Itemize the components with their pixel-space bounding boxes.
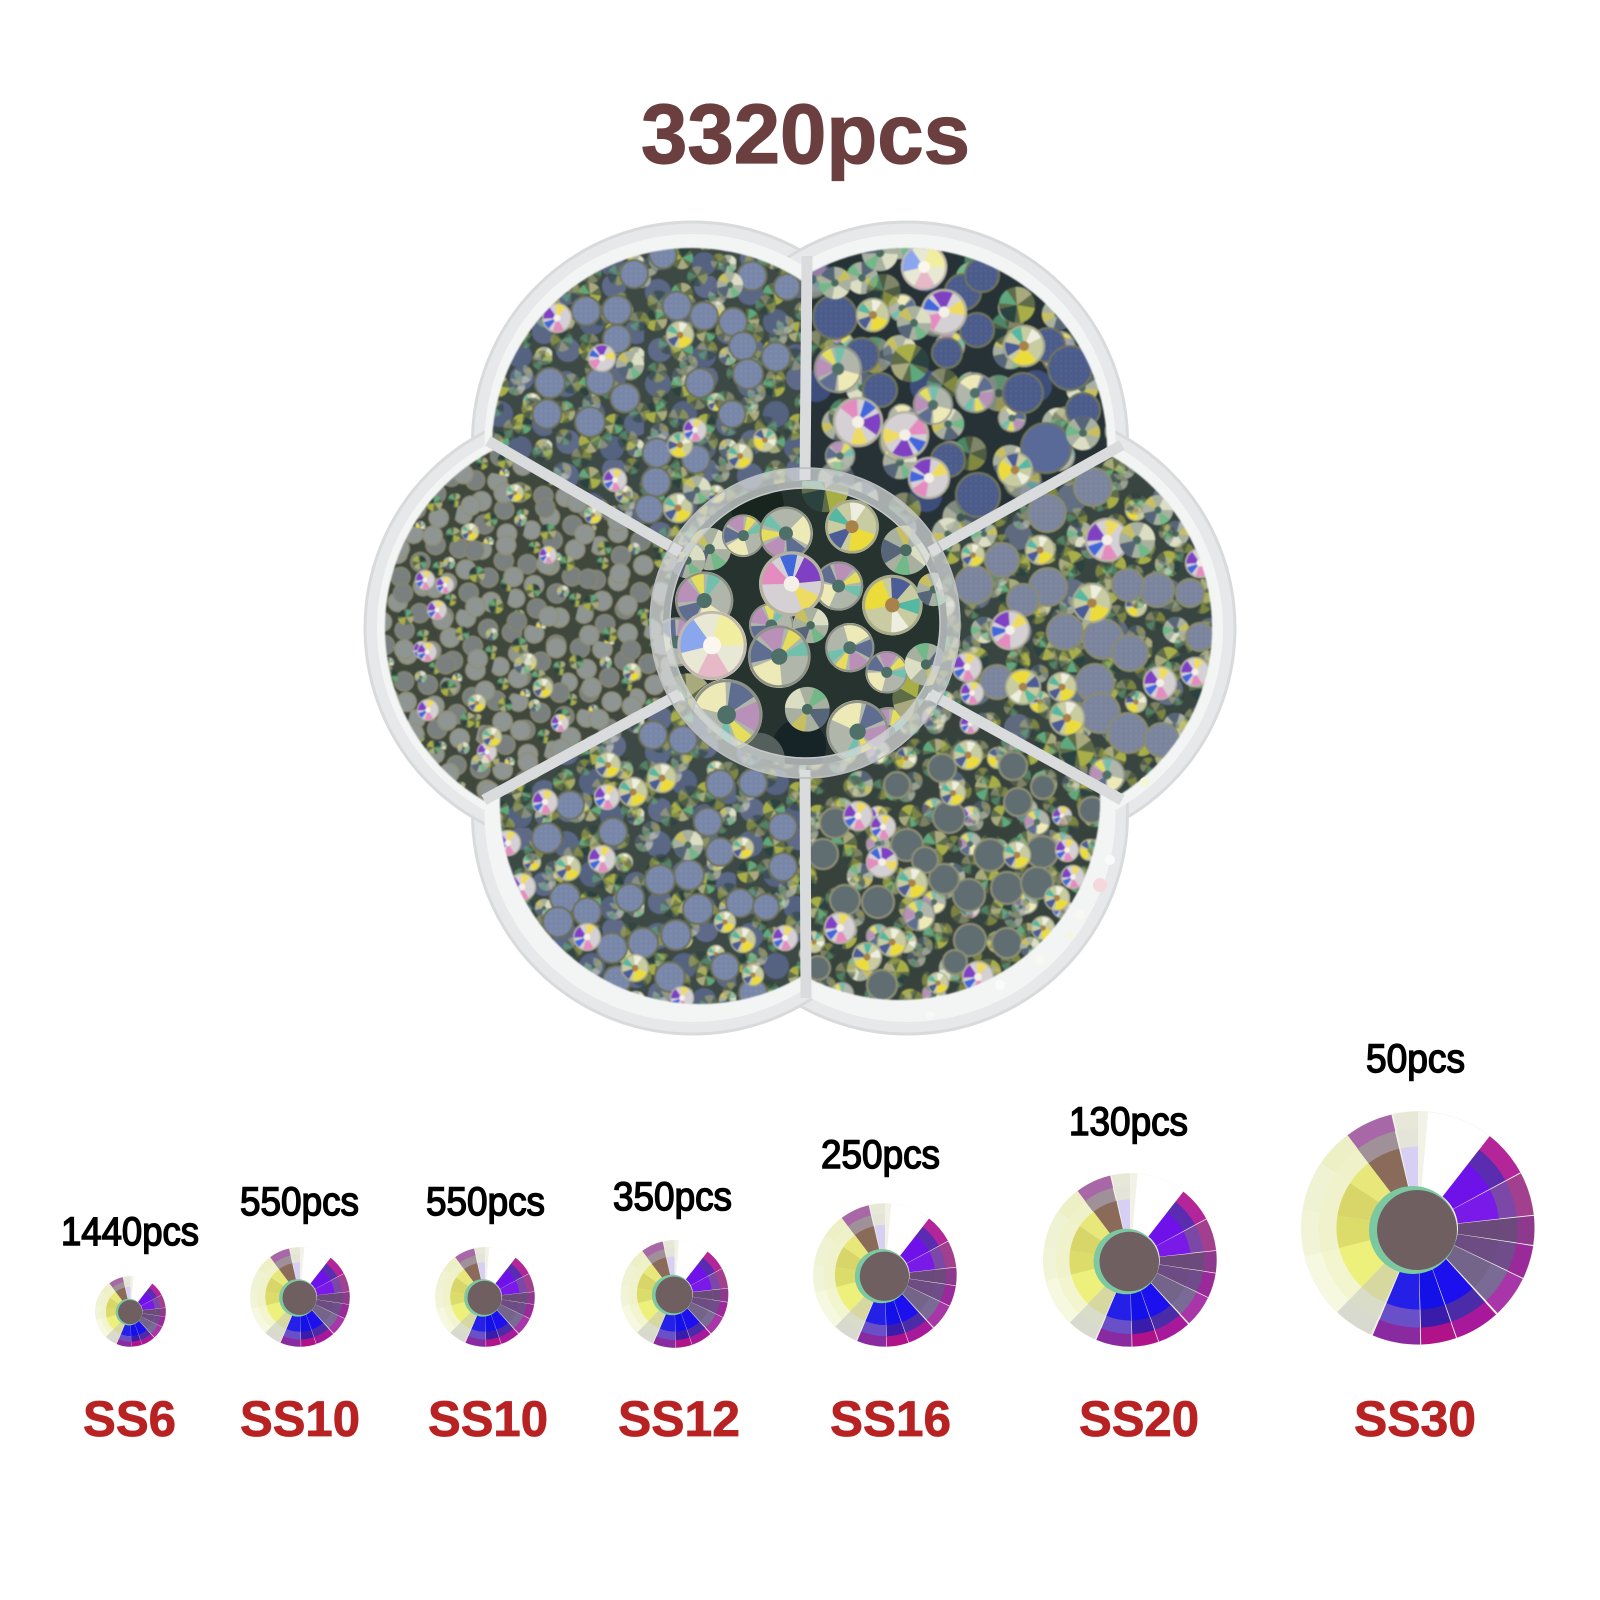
size scale row: [61, 1037, 1535, 1447]
item: SS6: [61, 1210, 199, 1447]
item: SS20: 130pcs: [1069, 1100, 1188, 1144]
panel: upper-right compartment: [805, 247, 1108, 554]
compartment dividers: [484, 256, 1122, 998]
panel: left compartment: [384, 450, 680, 802]
item: SS16: [813, 1133, 957, 1447]
panel: upper-left compartment: [491, 246, 806, 553]
item: SS12: SS12: [618, 1391, 740, 1447]
item: SS12: 350pcs: [613, 1175, 732, 1219]
title: 3320pcs: [641, 87, 970, 181]
item: SS10 second: [426, 1180, 548, 1447]
item: SS10 second: 550pcs: [426, 1180, 545, 1224]
item: SS16: SS16: [830, 1391, 951, 1447]
item: SS30: SS30: [1354, 1391, 1476, 1447]
bowl rim: [660, 478, 950, 768]
item: SS6: 1440pcs: [61, 1210, 199, 1254]
item: SS16: 250pcs: [821, 1133, 940, 1177]
box outline: [365, 222, 1235, 1034]
item: SS30: 50pcs: [1366, 1037, 1465, 1081]
panel: flower-shaped rhinestone box: [360, 210, 1240, 1034]
item: SS20: SS20: [1079, 1391, 1199, 1447]
item: SS10 first: 550pcs: [240, 1180, 359, 1224]
panel: lower-right compartment: [805, 700, 1101, 1002]
panel: centre bowl: [643, 465, 960, 787]
item: SS20: [1043, 1100, 1217, 1447]
item: SS10 first: SS10: [240, 1391, 360, 1447]
item: SS6: SS6: [83, 1391, 176, 1447]
item: SS12: [613, 1175, 740, 1447]
panel: lower-left compartment: [498, 700, 805, 1005]
panel: right compartment: [929, 456, 1213, 794]
box inner floor: [377, 234, 1223, 1022]
holographic flecks on lower-right rim: [926, 777, 1150, 1019]
large rhinestones in bowl: [663, 481, 946, 765]
item: SS10 second: SS10: [428, 1391, 548, 1447]
item: SS10 first: [240, 1180, 360, 1447]
item: SS30: [1301, 1037, 1535, 1447]
